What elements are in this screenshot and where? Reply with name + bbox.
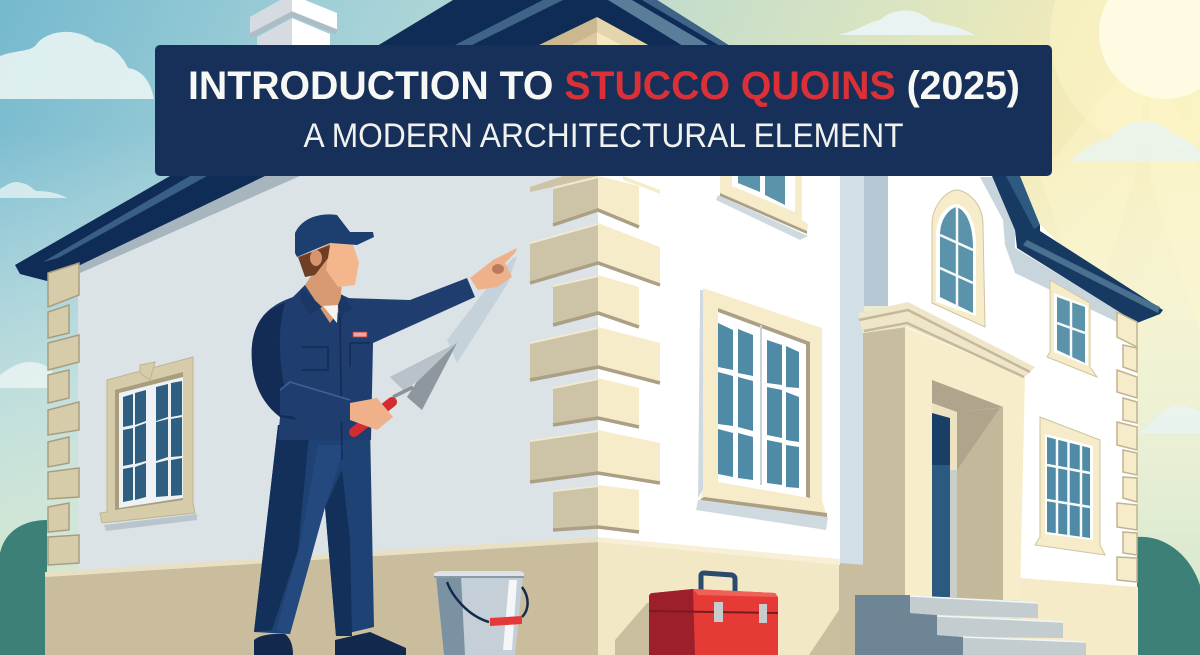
trowel shadow on wall	[447, 256, 517, 363]
chimney	[250, 0, 337, 50]
bucket	[434, 571, 528, 655]
toolbox	[649, 573, 778, 655]
left corner quoins	[48, 263, 79, 565]
small upper right window	[1047, 280, 1097, 377]
name tag	[353, 332, 367, 337]
central corner quoins	[530, 176, 660, 532]
arched window	[932, 190, 985, 327]
cap	[295, 214, 374, 257]
face	[322, 243, 359, 287]
lower right window	[1035, 417, 1105, 555]
title banner	[155, 45, 1052, 176]
upper window, right wall	[716, 176, 808, 240]
sun and rays	[1040, 0, 1200, 330]
pointing arm	[345, 278, 475, 343]
subtitle: A MODERN ARCHITECTURAL ELEMENT	[304, 117, 904, 155]
ear	[310, 250, 322, 266]
pockets and zip	[302, 317, 370, 460]
left roof	[15, 176, 265, 281]
torso	[252, 285, 373, 440]
trowel handle	[354, 402, 392, 432]
left wall window	[100, 357, 197, 531]
worker	[252, 214, 517, 655]
trees	[0, 520, 1200, 655]
neck	[305, 270, 342, 323]
title: INTRODUCTION TO STUCCO QUOINS (2025)	[188, 64, 1020, 108]
collar	[300, 288, 353, 323]
entrance steps	[855, 595, 1086, 655]
trowel	[390, 343, 457, 410]
legs	[254, 425, 374, 636]
clouds	[0, 10, 1200, 433]
portico entrance	[858, 302, 1035, 600]
left arm shading	[252, 303, 296, 420]
right roof	[992, 176, 1163, 323]
gripping hand	[350, 398, 393, 430]
central right window	[696, 288, 828, 530]
roof top	[377, 0, 730, 46]
house right wall	[598, 176, 1137, 590]
plinth	[45, 537, 1138, 655]
boots	[254, 632, 406, 655]
right corner quoins	[1117, 312, 1137, 582]
pointing hand	[470, 248, 517, 290]
house left wall	[78, 176, 600, 572]
sleeve	[280, 382, 350, 422]
undershirt	[323, 305, 338, 323]
hair	[298, 245, 330, 277]
